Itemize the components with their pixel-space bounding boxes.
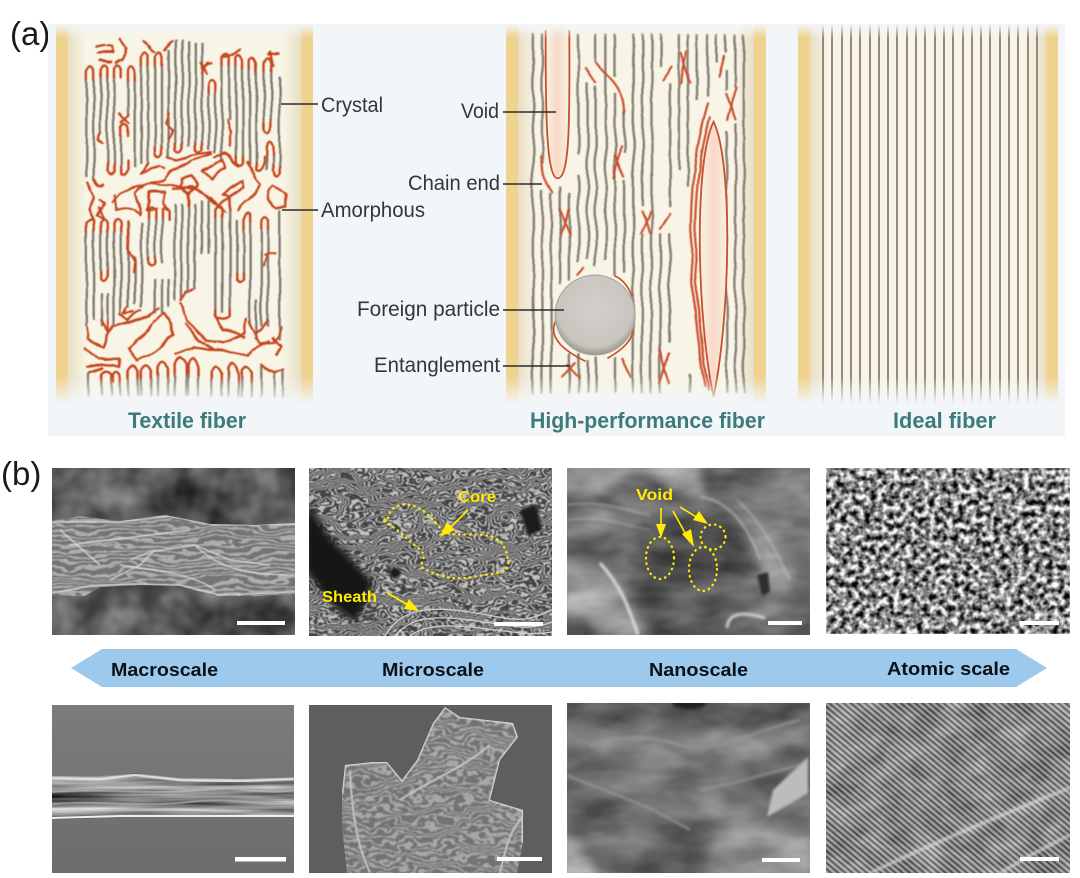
void 1 [546, 27, 569, 178]
leader: entanglement [503, 365, 570, 367]
soft tonal folds [567, 703, 810, 873]
flake [342, 707, 523, 873]
scale label: macroscale: Macroscale [111, 659, 218, 680]
scale bar [762, 858, 800, 862]
photo: nanoscale folds [567, 703, 810, 873]
caption: high-performance fiber: High-performance fiber [530, 408, 765, 433]
panel: fiber schematics background [48, 24, 1065, 436]
parallel chains [823, 24, 1037, 404]
void arrows [656, 507, 708, 547]
label: core: Core [458, 489, 496, 506]
surface texture [567, 703, 810, 873]
bright highlight [767, 757, 808, 817]
scale bar [235, 857, 286, 862]
leader: crystal [281, 103, 318, 105]
ribbon [52, 515, 295, 596]
caption: textile fiber: Textile fiber [128, 408, 246, 433]
label: void: Void [636, 487, 673, 504]
scale bar [1020, 857, 1059, 861]
scale bar [497, 857, 542, 861]
arrow: sheath [387, 593, 419, 611]
panel: ideal fiber [798, 24, 1058, 404]
scale bar [768, 621, 802, 625]
bright fold edges [567, 497, 790, 635]
fold edges [567, 720, 800, 830]
photo: macroscale fiber top [52, 468, 295, 635]
label: foreign particle: Foreign particle [357, 298, 500, 321]
photo: microscale flake [309, 705, 552, 873]
label: sheath: Sheath [322, 589, 377, 606]
photo: atomic scale disordered [826, 468, 1070, 634]
dark cavity [305, 500, 373, 623]
label: panel b: (b) [1, 455, 41, 492]
leader: amorphous [282, 209, 318, 211]
caption: ideal fiber: Ideal fiber [893, 408, 996, 433]
arrow: core [440, 510, 468, 537]
leader: foreign particle [503, 309, 564, 311]
small holes [389, 504, 542, 578]
scale label: atomic scale: Atomic scale [887, 658, 1010, 679]
soft tonal folds [567, 468, 810, 635]
label: panel a: (a) [10, 15, 50, 52]
photo: microscale core and sheath [309, 468, 552, 636]
bright lattice defect [870, 788, 1070, 873]
layered sheath [385, 609, 552, 636]
ribbon [52, 773, 294, 820]
fiber body: ideal [798, 24, 1058, 404]
fiber body: high-performance [506, 24, 766, 404]
label: chain end: Chain end [408, 172, 500, 195]
foreign particle halo strands [554, 276, 633, 361]
core outline [382, 505, 508, 578]
fade: top and bottom edges of fibers [48, 24, 1065, 436]
photo: atomic scale lattice [826, 703, 1070, 873]
scale label: microscale: Microscale [382, 659, 484, 680]
photo: macroscale fiber bottom [52, 705, 294, 873]
hairpin fold caps [86, 52, 280, 382]
surface texture [567, 468, 810, 635]
photo: nanoscale voids [567, 468, 810, 635]
contrast overlay [826, 703, 1070, 873]
foreign particle [555, 275, 635, 355]
void 2 [700, 122, 727, 397]
label: entanglement: Entanglement [374, 354, 500, 377]
dark notch [670, 703, 708, 710]
leader lines and labels [281, 94, 570, 377]
chain ends and entanglements [540, 52, 737, 390]
panel: high-performance fiber [506, 24, 766, 404]
label: crystal: Crystal [321, 94, 383, 117]
folded chains [86, 38, 286, 397]
leader: chain end [503, 183, 542, 185]
panel: textile fiber [56, 24, 313, 404]
leader: void [503, 111, 556, 113]
fiber body: textile [56, 24, 313, 404]
label: amorphous: Amorphous [321, 199, 425, 222]
dark hole [757, 572, 770, 596]
scale bar [237, 621, 285, 625]
scale bar [494, 622, 543, 626]
crystal chains [533, 33, 744, 393]
amorphous tangles [86, 38, 286, 373]
label: void: Void [461, 100, 499, 123]
scale arrow [71, 649, 1047, 687]
scale bar [1020, 621, 1059, 625]
void outlines [646, 524, 726, 591]
crystal segments [86, 40, 283, 397]
scale label: nanoscale: Nanoscale [649, 659, 748, 680]
